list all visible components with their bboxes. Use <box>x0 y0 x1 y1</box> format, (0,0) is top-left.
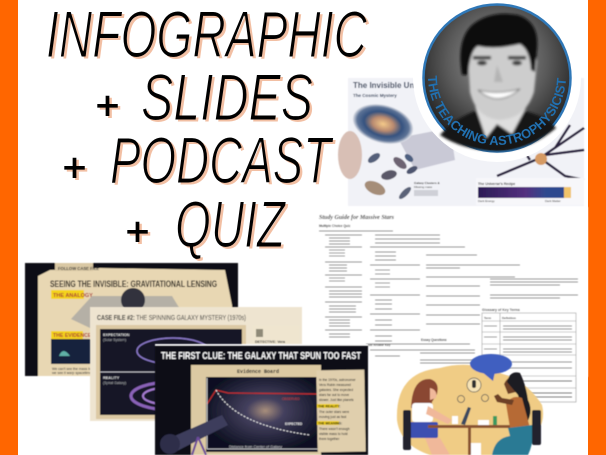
title: product list: PODCAST <box>110 123 334 197</box>
evidence note: slower. Just like planets <box>319 398 354 402</box>
title: product list: SLIDES <box>141 60 313 134</box>
panel: study guide document: Essay Questions <box>421 338 447 342</box>
author badge: photo and name: THE TEACHING ASTROPHYSICIST <box>428 76 566 146</box>
slide 1: gravitational lensing: FOLLOW CASE FILE <box>58 266 99 271</box>
microphone icon <box>467 378 481 392</box>
panel: study guide document: Glossary of Key Terms <box>482 308 520 312</box>
slide 2: spinning galaxy mystery <box>90 307 302 421</box>
author badge: photo and name <box>413 3 581 162</box>
title: product list: + <box>62 144 87 191</box>
slide 1: gravitational lensing: SEEING THE INVISIBLE: GRAVITATIONAL LENSING <box>50 279 217 289</box>
left person <box>403 379 452 455</box>
panel: study guide document: Definition <box>502 316 516 320</box>
slide 2: spinning galaxy mystery: DETECTIVE: Vera <box>255 340 286 344</box>
evidence note <box>316 370 366 452</box>
slide 1: gravitational lensing: THE ANALOGY <box>53 293 93 299</box>
panel: infographic preview: Dark Matter <box>545 199 561 203</box>
title: product list: QUIZ <box>175 187 287 261</box>
portrait <box>440 14 556 151</box>
badge name <box>428 76 566 145</box>
slide 2: spinning galaxy mystery: (Spiral Galaxy) <box>103 381 126 385</box>
slide 2: spinning galaxy mystery: EXPECTATION <box>103 333 130 337</box>
slide 3: the first clue: Distance from Center of Galaxy <box>229 445 282 449</box>
evidence note: stars far out to move <box>319 393 349 397</box>
panel: study guide document: Multiple Choice Quiz <box>319 224 351 228</box>
evidence note: Vera Rubin measured <box>319 383 351 387</box>
slide 2: spinning galaxy mystery: (Solar System) <box>103 338 126 342</box>
slide 1: gravitational lensing: We can't see the mass but <box>52 367 93 371</box>
evidence note: The outer stars were <box>319 410 349 414</box>
title: product list: + <box>95 82 120 129</box>
right person <box>492 372 541 455</box>
panel: infographic preview: The Universe's Recipe <box>478 182 515 186</box>
panel: study guide document <box>315 207 588 402</box>
evidence note: THE REALITY: <box>318 404 340 408</box>
slide 3: the first clue: EXPECTED <box>285 422 303 426</box>
panel: study guide document: Term <box>484 316 491 320</box>
evidence note: moving just as fast <box>319 415 346 419</box>
evidence note: There wasn't enough <box>319 427 350 431</box>
slide 3: the first clue: Evidence Board <box>237 369 279 375</box>
slide 3: the first clue <box>155 344 368 455</box>
panel: study guide document: Quiz Answer Key <box>366 343 391 347</box>
slide 1: gravitational lensing: we see it warp spacetime <box>52 371 91 375</box>
panel: infographic preview: Missing mass <box>414 185 433 189</box>
slide 3: the first clue: OBSERVED <box>282 397 300 401</box>
podcast illustration <box>397 354 543 455</box>
evidence note: THE MEANING: <box>318 422 342 426</box>
panel: infographic preview: Galaxy Clusters & <box>414 181 441 185</box>
title: product list <box>46 0 368 261</box>
left orange border <box>0 0 18 455</box>
table with laptop and cup <box>428 407 514 455</box>
panel: infographic preview: The Cosmic Mystery <box>353 93 397 98</box>
panel: infographic preview <box>338 78 584 206</box>
evidence note: In the 1970s, astronomer <box>319 378 357 382</box>
panel: study guide document: Study Guide for Massive Stars <box>319 215 395 221</box>
speech bubble <box>470 354 512 381</box>
right orange border <box>588 0 606 455</box>
evidence note: visible mass to hold <box>319 432 348 436</box>
slide 3: the first clue: THE FIRST CLUE: THE GALAXY THAT SPUN TOO FAST <box>161 351 361 362</box>
slide 1: gravitational lensing: THE EVIDENCE <box>53 333 92 339</box>
slide 1: gravitational lensing <box>25 263 238 376</box>
title: product list: + <box>125 208 150 255</box>
panel: infographic preview: The Invisible Universe <box>353 81 438 90</box>
panel: infographic preview: Dark Energy <box>478 199 495 203</box>
slide 2: spinning galaxy mystery: CASE FILE #2: THE SPINNING GALAXY MYSTERY (1970s) <box>97 315 246 322</box>
slide 2: spinning galaxy mystery: REALITY <box>103 376 120 380</box>
evidence note: galaxies. She expected <box>319 388 353 392</box>
evidence note: them together <box>319 437 340 441</box>
